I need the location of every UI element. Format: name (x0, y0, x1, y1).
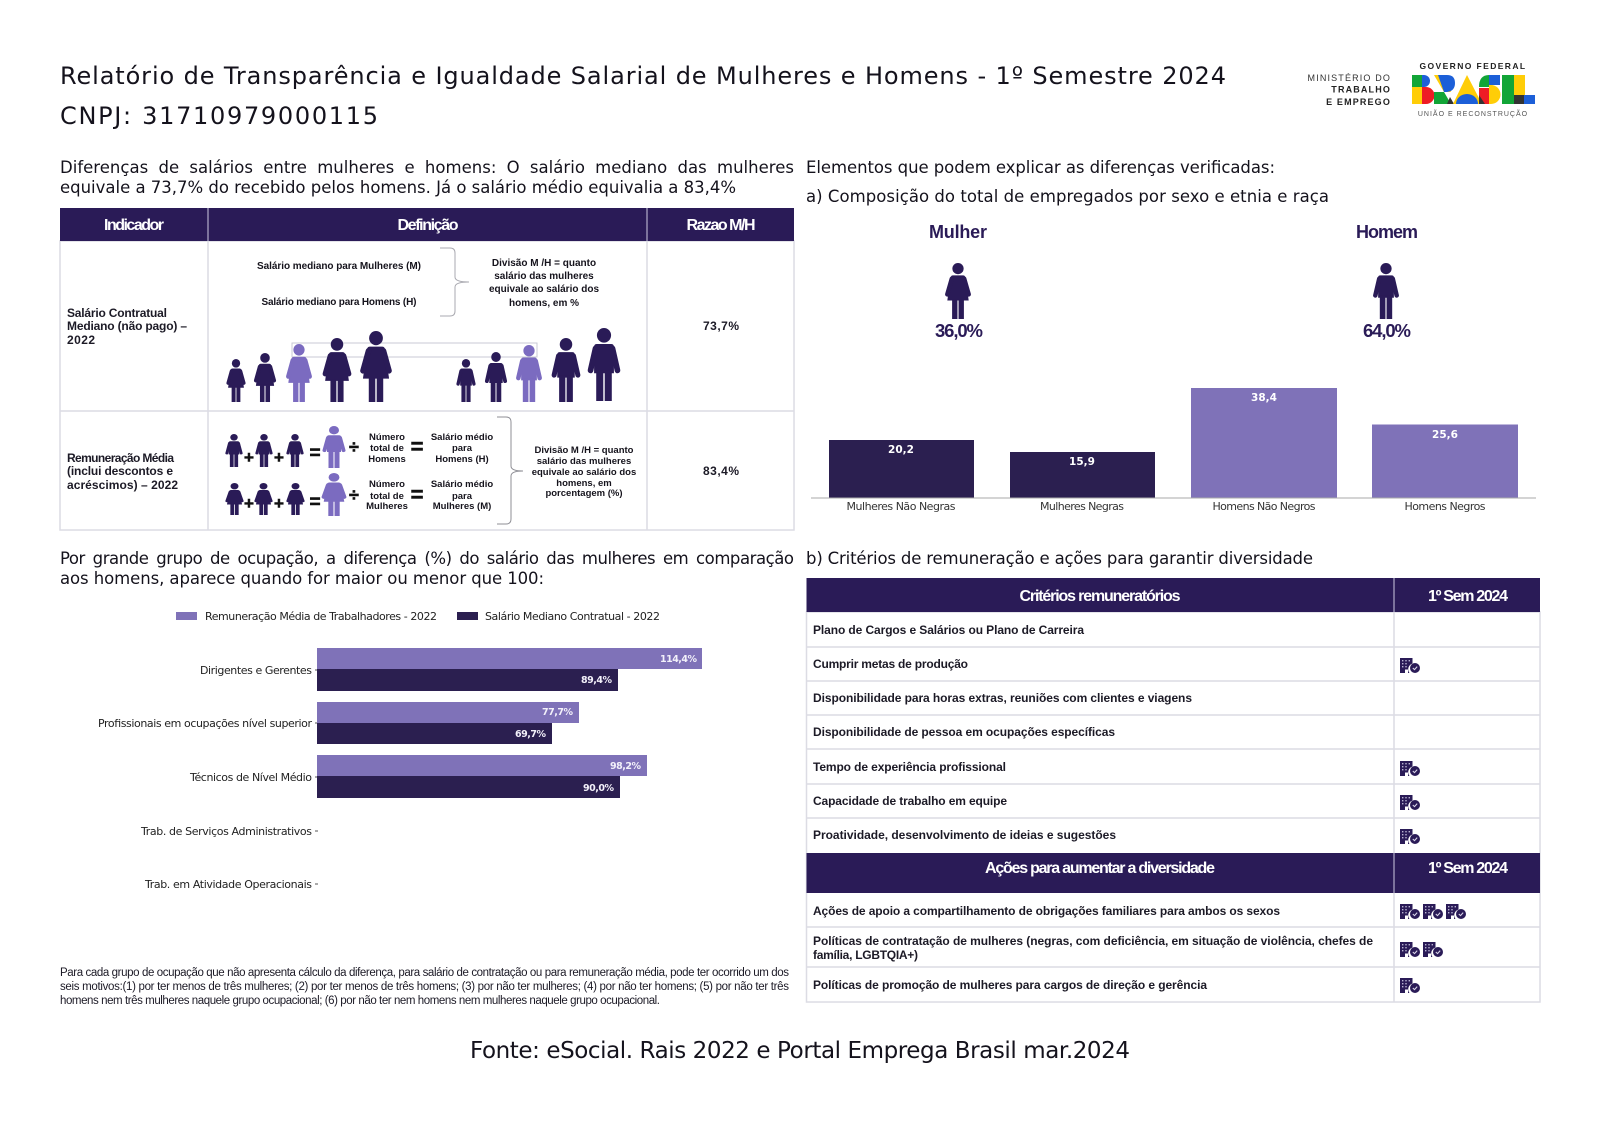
bar chart: occupation groups: 90,0% (583, 783, 614, 794)
intro paragraph: wage differences: Diferenças de salários entre mulheres e homens: O salário mediano das mulheres (60, 158, 794, 177)
logo: Governo Federal Brasil: UNIÃO E RECONSTRUÇÃO (1418, 109, 1528, 118)
definition diagram: average pay: total de (370, 491, 404, 502)
bar chart: occupation groups: 98,2% (610, 761, 641, 772)
bar chart: occupation groups: Dirigentes e Gerentes (200, 664, 312, 677)
definition diagram: average pay (227, 417, 636, 524)
definition diagram: average pay: Número (369, 479, 405, 490)
definition diagram: average pay: + (274, 494, 284, 513)
panel: remuneration criteria table: 1º Sem 2024 (1428, 860, 1508, 877)
title: CNPJ: 31710979000115 (60, 102, 378, 130)
definition diagram: average pay: = (309, 492, 321, 513)
definition diagram: average pay: = (411, 434, 423, 459)
bar chart: employees by sex and race: Homens Não Negros (1212, 500, 1316, 513)
panel: remuneration criteria table (806, 578, 1540, 1002)
paragraph: occupation groups (60, 549, 794, 588)
definition diagram: average pay: para (452, 443, 473, 454)
footnote: homens nem três mulheres naquele grupo ocupacional; (6) por não ter nem homens nem mulheres naquele grupo ocupacional. (60, 995, 660, 1007)
definition diagram: average pay: Mulheres (366, 501, 408, 512)
source line: Fonte: eSocial. Rais 2022 e Portal Emprega Brasil mar.2024 (470, 1038, 1130, 1064)
panel: remuneration criteria table: Disponibilidade de pessoa em ocupações específicas (813, 725, 1115, 739)
logo: Governo Federal Brasil (1412, 61, 1535, 118)
definition diagram: average pay: Salário médio (431, 479, 493, 490)
panel: remuneration criteria table: família, LGBTQIA+) (813, 948, 918, 962)
footnote (60, 967, 789, 1007)
man share: 64,0% (1363, 320, 1411, 341)
bar chart: employees by sex and race: Mulheres Negras (1040, 500, 1124, 513)
paragraph: occupation groups: Por grande grupo de ocupação, a diferença (%) do salário das mulheres em comparação (60, 549, 794, 568)
definition diagram: average pay: ÷ (349, 485, 359, 505)
panel: remuneration criteria table: Políticas de contratação de mulheres (negras, com deficiência, em situação de violência, chefes de (813, 934, 1373, 948)
chart legend: Remuneração Média de Trabalhadores - 2022 (205, 610, 437, 623)
definition diagram: median salary: Divisão M /H = quanto (492, 258, 596, 269)
bar chart: occupation groups: Trab. de Serviços Administrativos (140, 825, 312, 838)
definition diagram: average pay: Divisão M /H = quanto (535, 445, 634, 456)
panel: indicator table: acréscimos) – 2022 (67, 478, 178, 492)
panel: indicator table: (inclui descontos e (67, 464, 173, 478)
panel: remuneration criteria table: Ações de apoio a compartilhamento de obrigações familiares para ambos os sexos (813, 904, 1280, 918)
bar chart: employees by sex and race: 38,4 (1251, 392, 1277, 404)
woman share (929, 222, 987, 341)
definition diagram: average pay: homens, em (556, 478, 612, 489)
panel: remuneration criteria table: Disponibilidade para horas extras, reuniões com clientes e viagens (813, 691, 1192, 705)
panel: remuneration criteria table: Cumprir metas de produção (813, 657, 968, 671)
bar chart: occupation groups: 77,7% (542, 707, 573, 718)
bar chart: occupation groups: 114,4% (660, 654, 697, 665)
panel: remuneration criteria table: 1º Sem 2024 (1428, 588, 1508, 605)
bar chart: employees by sex and race: 15,9 (1069, 456, 1095, 468)
man share: Homem (1356, 222, 1418, 242)
definition diagram: average pay: salário das mulheres (537, 456, 631, 467)
panel: indicator table: Remuneração Média (67, 451, 174, 465)
bar chart: employees by sex and race: 25,6 (1432, 429, 1458, 441)
definition diagram: median salary: salário das mulheres (494, 271, 594, 282)
title: Relatório de Transparência e Igualdade Salarial de Mulheres e Homens - 1º Semestre 2024 (60, 62, 1226, 90)
panel: remuneration criteria table: Capacidade de trabalho em equipe (813, 794, 1007, 808)
definition diagram: average pay: Homens (H) (435, 454, 489, 465)
man share (1356, 222, 1418, 341)
heading: criteria: b) Critérios de remuneração e ações para garantir diversidade (806, 549, 1313, 568)
panel: indicator table: 73,7% (703, 319, 739, 333)
panel: indicator table: Indicador (104, 217, 164, 234)
bar chart: occupation groups: 89,4% (581, 675, 612, 686)
chart legend (176, 610, 660, 623)
panel: indicator table: Definição (398, 217, 459, 234)
woman share: Mulher (929, 222, 987, 242)
definition diagram: average pay: para (452, 491, 473, 502)
panel: indicator table: Mediano (não pago) – (67, 319, 187, 333)
intro paragraph: wage differences (60, 158, 794, 197)
panel: indicator table: Razao M/H (686, 217, 756, 234)
intro paragraph: wage differences: equivale a 73,7% do recebido pelos homens. Já o salário médio equivalia a 83,4% (60, 178, 736, 197)
definition diagram: average pay: = (411, 482, 423, 507)
bar chart: employees by sex and race: Homens Negros (1404, 500, 1486, 513)
definition diagram: average pay: Número (369, 432, 405, 443)
definition diagram: median salary: homens, em % (509, 298, 579, 309)
panel: indicator table: 83,4% (703, 464, 739, 478)
panel: remuneration criteria table: Proatividade, desenvolvimento de ideias e sugestões (813, 828, 1116, 842)
definition diagram: average pay: Mulheres (M) (433, 501, 491, 512)
definition diagram: average pay: ÷ (349, 437, 359, 457)
bar chart: occupation groups: Profissionais em ocupações nível superior (98, 717, 312, 730)
woman share: 36,0% (935, 320, 983, 341)
definition diagram: median salary: Salário mediano para Mulheres (M) (257, 261, 421, 272)
title (60, 62, 1226, 130)
bar chart: employees by sex and race: 20,2 (888, 444, 914, 456)
definition diagram: average pay: + (274, 448, 284, 467)
definition diagram: average pay: + (244, 448, 254, 467)
logo: Ministério do Trabalho e Emprego: MINISTÉRIO DO (1308, 73, 1391, 83)
definition diagram: average pay: porcentagem (%) (545, 488, 623, 499)
panel: remuneration criteria table: Políticas de promoção de mulheres para cargos de direção e gerência (813, 978, 1207, 992)
chart legend: Salário Mediano Contratual - 2022 (485, 610, 660, 623)
bar chart: occupation groups: Trab. em Atividade Operacionais (144, 878, 312, 891)
heading: explanatory elements: Elementos que podem explicar as diferenças verificadas: (806, 158, 1275, 177)
definition diagram: median salary: Salário mediano para Homens (H) (262, 297, 416, 308)
logo: Governo Federal Brasil: GOVERNO FEDERAL (1420, 61, 1526, 71)
bar chart: occupation groups (98, 648, 702, 891)
logo: Ministério do Trabalho e Emprego (1308, 73, 1391, 107)
bar chart: employees by sex and race: Mulheres Não Negras (846, 500, 956, 513)
panel: indicator table: Salário Contratual (67, 306, 167, 320)
definition diagram: average pay: total de (370, 443, 404, 454)
definition diagram: average pay: equivale ao salário dos (532, 467, 636, 478)
heading: explanatory elements (806, 158, 1329, 206)
footnote: Para cada grupo de ocupação que não apresenta cálculo da diferença, para salário de contratação ou para remuneração média, pode ter ocorrido um dos (60, 967, 789, 979)
panel: remuneration criteria table: Tempo de experiência profissional (813, 760, 1006, 774)
definition diagram: average pay: = (309, 443, 321, 464)
definition diagram: median salary: equivale ao salário dos (489, 284, 599, 295)
heading: explanatory elements: a) Composição do total de empregados por sexo e etnia e raça (806, 187, 1329, 206)
footnote: seis motivos:(1) por ter menos de três mulheres; (2) por ter menos de três homens; (3) por não ter mulheres; (4) por não ter homens; (5) por não ter três (60, 981, 789, 993)
definition diagram: median salary (228, 248, 617, 402)
panel: remuneration criteria table: Critérios remuneratórios (1020, 588, 1181, 605)
paragraph: occupation groups: aos homens, aparece quando for maior ou menor que 100: (60, 569, 544, 588)
definition diagram: average pay: Salário médio (431, 432, 493, 443)
definition diagram: average pay: + (244, 494, 254, 513)
bar chart: employees by sex and race (811, 388, 1536, 513)
panel: remuneration criteria table: Plano de Cargos e Salários ou Plano de Carreira (813, 623, 1084, 637)
bar chart: occupation groups: Técnicos de Nível Médio (189, 771, 312, 784)
logo: Ministério do Trabalho e Emprego: E EMPREGO (1326, 97, 1391, 107)
panel: remuneration criteria table: Ações para aumentar a diversidade (985, 860, 1215, 877)
panel: indicator table: 2022 (67, 333, 95, 347)
bar chart: occupation groups: 69,7% (515, 729, 546, 740)
definition diagram: average pay: Homens (368, 454, 406, 465)
logo: Ministério do Trabalho e Emprego: TRABALHO (1331, 84, 1391, 94)
panel: indicator table (60, 208, 794, 530)
